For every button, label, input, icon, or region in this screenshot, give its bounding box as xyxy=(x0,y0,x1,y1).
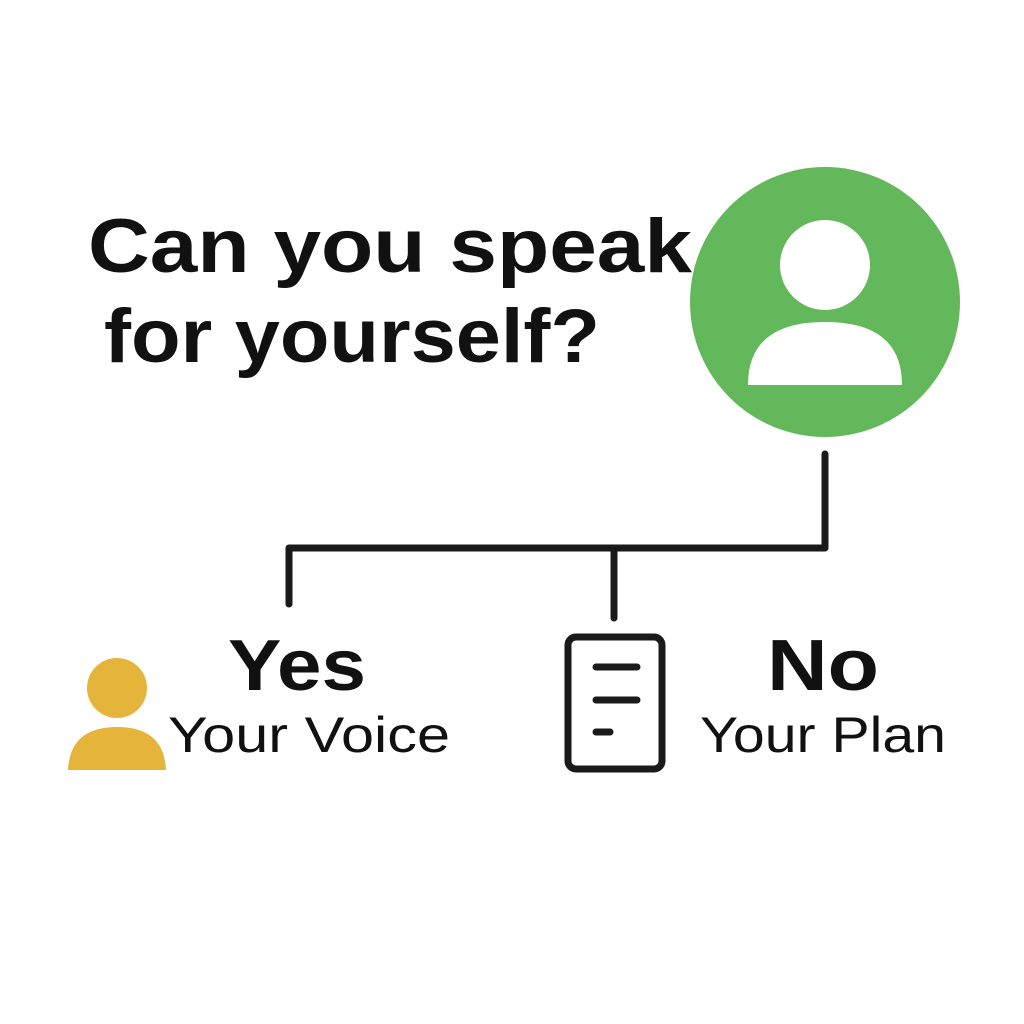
title: Can you speak xyxy=(88,204,693,289)
no subtitle: Your Plan xyxy=(700,707,946,763)
yes subtitle: Your Voice xyxy=(168,707,450,763)
icon: green person circle xyxy=(690,167,960,437)
icon: yellow person xyxy=(68,658,166,770)
icon: document xyxy=(568,637,662,769)
yes label: Yes xyxy=(228,626,366,706)
flowchart connector lines xyxy=(289,454,825,618)
branch: yes xyxy=(68,626,450,770)
branch: no xyxy=(568,626,946,769)
title: for yourself? xyxy=(104,294,600,379)
title xyxy=(88,204,693,379)
no label: No xyxy=(767,626,879,706)
